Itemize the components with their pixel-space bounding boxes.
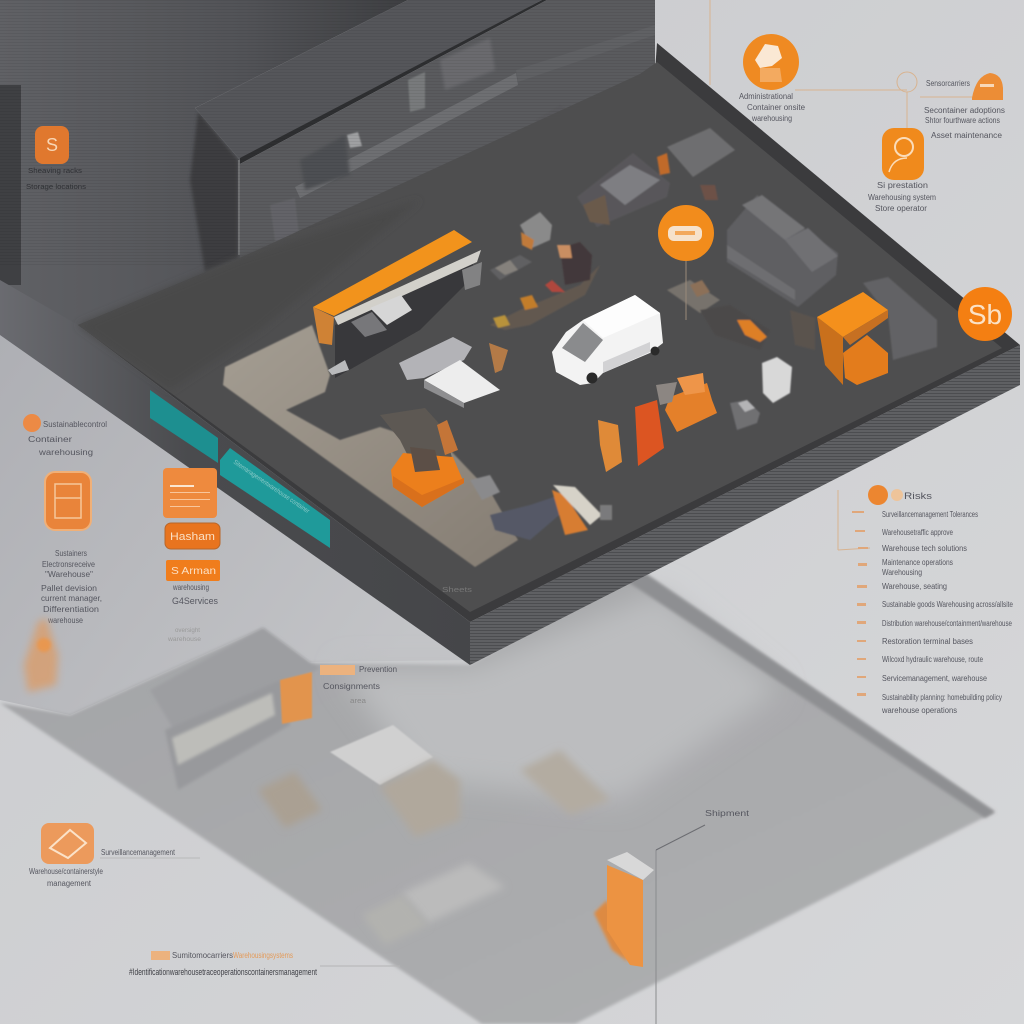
shelves at back right xyxy=(727,195,937,360)
badge at right edge: Sb xyxy=(968,299,1002,330)
left card caption: "Warehouse" xyxy=(45,570,93,579)
right legend list: Warehouse, seating xyxy=(882,582,947,591)
top icon: worker: Container onsite xyxy=(747,103,806,112)
right legend list: Restoration terminal bases xyxy=(882,637,973,646)
right legend list: Maintenance operations xyxy=(882,558,953,567)
left card caption: Sustainers xyxy=(55,549,87,558)
orange badge above van area xyxy=(658,205,714,320)
top icon: helmet with label: Sensorcarriers xyxy=(926,79,970,88)
orange and red rack units xyxy=(598,373,717,472)
slab top surface xyxy=(78,43,1020,622)
building back section xyxy=(0,0,655,330)
wall icon with caption: Sheaving racks xyxy=(28,168,83,175)
right work bench xyxy=(667,280,815,430)
bottom orange cabinet with shipment label: Shipment xyxy=(705,809,750,818)
bottom text lines: Sumitomocarriers xyxy=(172,951,233,960)
left card caption: current manager, xyxy=(41,594,102,603)
lower platform callout xyxy=(320,665,397,705)
top icon: helmet with label: Shtor fourthware actions xyxy=(925,116,1000,125)
slab side faces xyxy=(0,280,1020,665)
shelf wall xyxy=(240,0,655,262)
wall icon with caption xyxy=(26,126,87,191)
teal tags on slab edge: Sitemanagementwarehouse container xyxy=(232,459,311,515)
bottom text lines: Warehousingsystems xyxy=(233,951,293,960)
left column header: warehousing xyxy=(38,448,93,457)
top icon: operator: Warehousing system xyxy=(868,193,936,202)
top icon: worker xyxy=(739,34,806,123)
right legend list: Warehousing xyxy=(882,568,922,577)
white van xyxy=(552,295,663,385)
top icon: operator xyxy=(868,128,936,213)
lower platform callout: Consignments xyxy=(323,682,380,691)
right-hand orange cards: warehouse xyxy=(167,637,202,643)
right-hand orange cards: S Arman xyxy=(171,566,216,577)
left card caption: Electronsreceive xyxy=(42,560,95,569)
left hazy backdrop xyxy=(0,330,470,715)
right-hand orange cards xyxy=(163,468,220,643)
right legend list: Warehousetraffic approve xyxy=(882,528,953,537)
bottom-left orange icon with caption xyxy=(29,823,200,888)
left card caption: warehouse xyxy=(47,616,83,625)
left card caption: Differentiation xyxy=(43,605,99,614)
lower platform callout: Prevention xyxy=(359,665,397,674)
right legend list: Wilcoxd hydraulic warehouse, route xyxy=(882,655,983,664)
left wall xyxy=(0,0,408,330)
lower ghost platform xyxy=(0,570,995,1024)
wall icon with caption: S xyxy=(46,135,58,155)
central work area clutter xyxy=(490,242,600,330)
right legend list: Servicemanagement, warehouse xyxy=(882,674,987,683)
slab small label: Sheets xyxy=(442,587,473,594)
right legend list: Risks xyxy=(904,491,933,501)
left column header: Container xyxy=(28,435,72,444)
left column header: Sustainablecontrol xyxy=(43,420,107,429)
orange canopy truck xyxy=(313,230,482,378)
tan pavement area xyxy=(223,325,518,567)
bottom-left orange icon with caption: Warehouse/containerstyle xyxy=(29,867,103,876)
ghost objects in lower platform xyxy=(165,672,610,945)
top icon: worker: warehousing xyxy=(751,114,792,123)
right-hand orange cards: G4Services xyxy=(172,596,218,607)
right-hand orange cards: Hasham xyxy=(170,531,215,543)
bottom text lines xyxy=(129,951,400,977)
roof band xyxy=(195,0,542,160)
left icon card: cabinet xyxy=(45,472,91,530)
left card caption: Pallet devision xyxy=(41,584,97,593)
back machinery cluster xyxy=(520,128,735,250)
right legend list: Surveillancemanagement Tolerances xyxy=(882,510,978,519)
left column header xyxy=(23,414,107,457)
bottom orange cabinet with shipment label xyxy=(594,809,750,1024)
right legend list: warehouse operations xyxy=(881,706,957,715)
lower platform callout: area xyxy=(350,698,366,705)
right-hand orange cards: oversight xyxy=(175,628,200,634)
wall icon with caption: Storage locations xyxy=(26,184,87,191)
top icon: helmet with label xyxy=(924,73,1005,140)
orange excavator machine xyxy=(380,408,464,507)
top icon: operator: Store operator xyxy=(875,204,927,213)
top icon: helmet with label: Asset maintenance xyxy=(931,131,1003,140)
right-hand orange cards: warehousing xyxy=(172,583,209,592)
top icon: worker: Administrational xyxy=(739,92,793,101)
bottom-left orange icon with caption: management xyxy=(47,879,92,888)
bottom yard equipment xyxy=(470,475,612,540)
badge at right edge xyxy=(958,287,1012,341)
top icon: helmet with label: Secontainer adoptions xyxy=(924,106,1005,115)
white flat cargo xyxy=(399,337,508,408)
faded orange figure xyxy=(24,618,58,692)
connector lines top right xyxy=(710,0,1002,130)
right legend list: Warehouse tech solutions xyxy=(882,544,967,553)
right legend list xyxy=(838,485,1013,715)
left card caption xyxy=(41,549,102,625)
bottom-left orange icon with caption: Surveillancemanagement xyxy=(101,848,176,857)
top icon: operator: Si prestation xyxy=(877,181,928,190)
teal tags on slab edge xyxy=(150,390,330,548)
orange crate stack right xyxy=(817,292,888,385)
bottom text lines: #Identificationwarehousetraceoperationscontainersmanagement xyxy=(129,967,317,977)
